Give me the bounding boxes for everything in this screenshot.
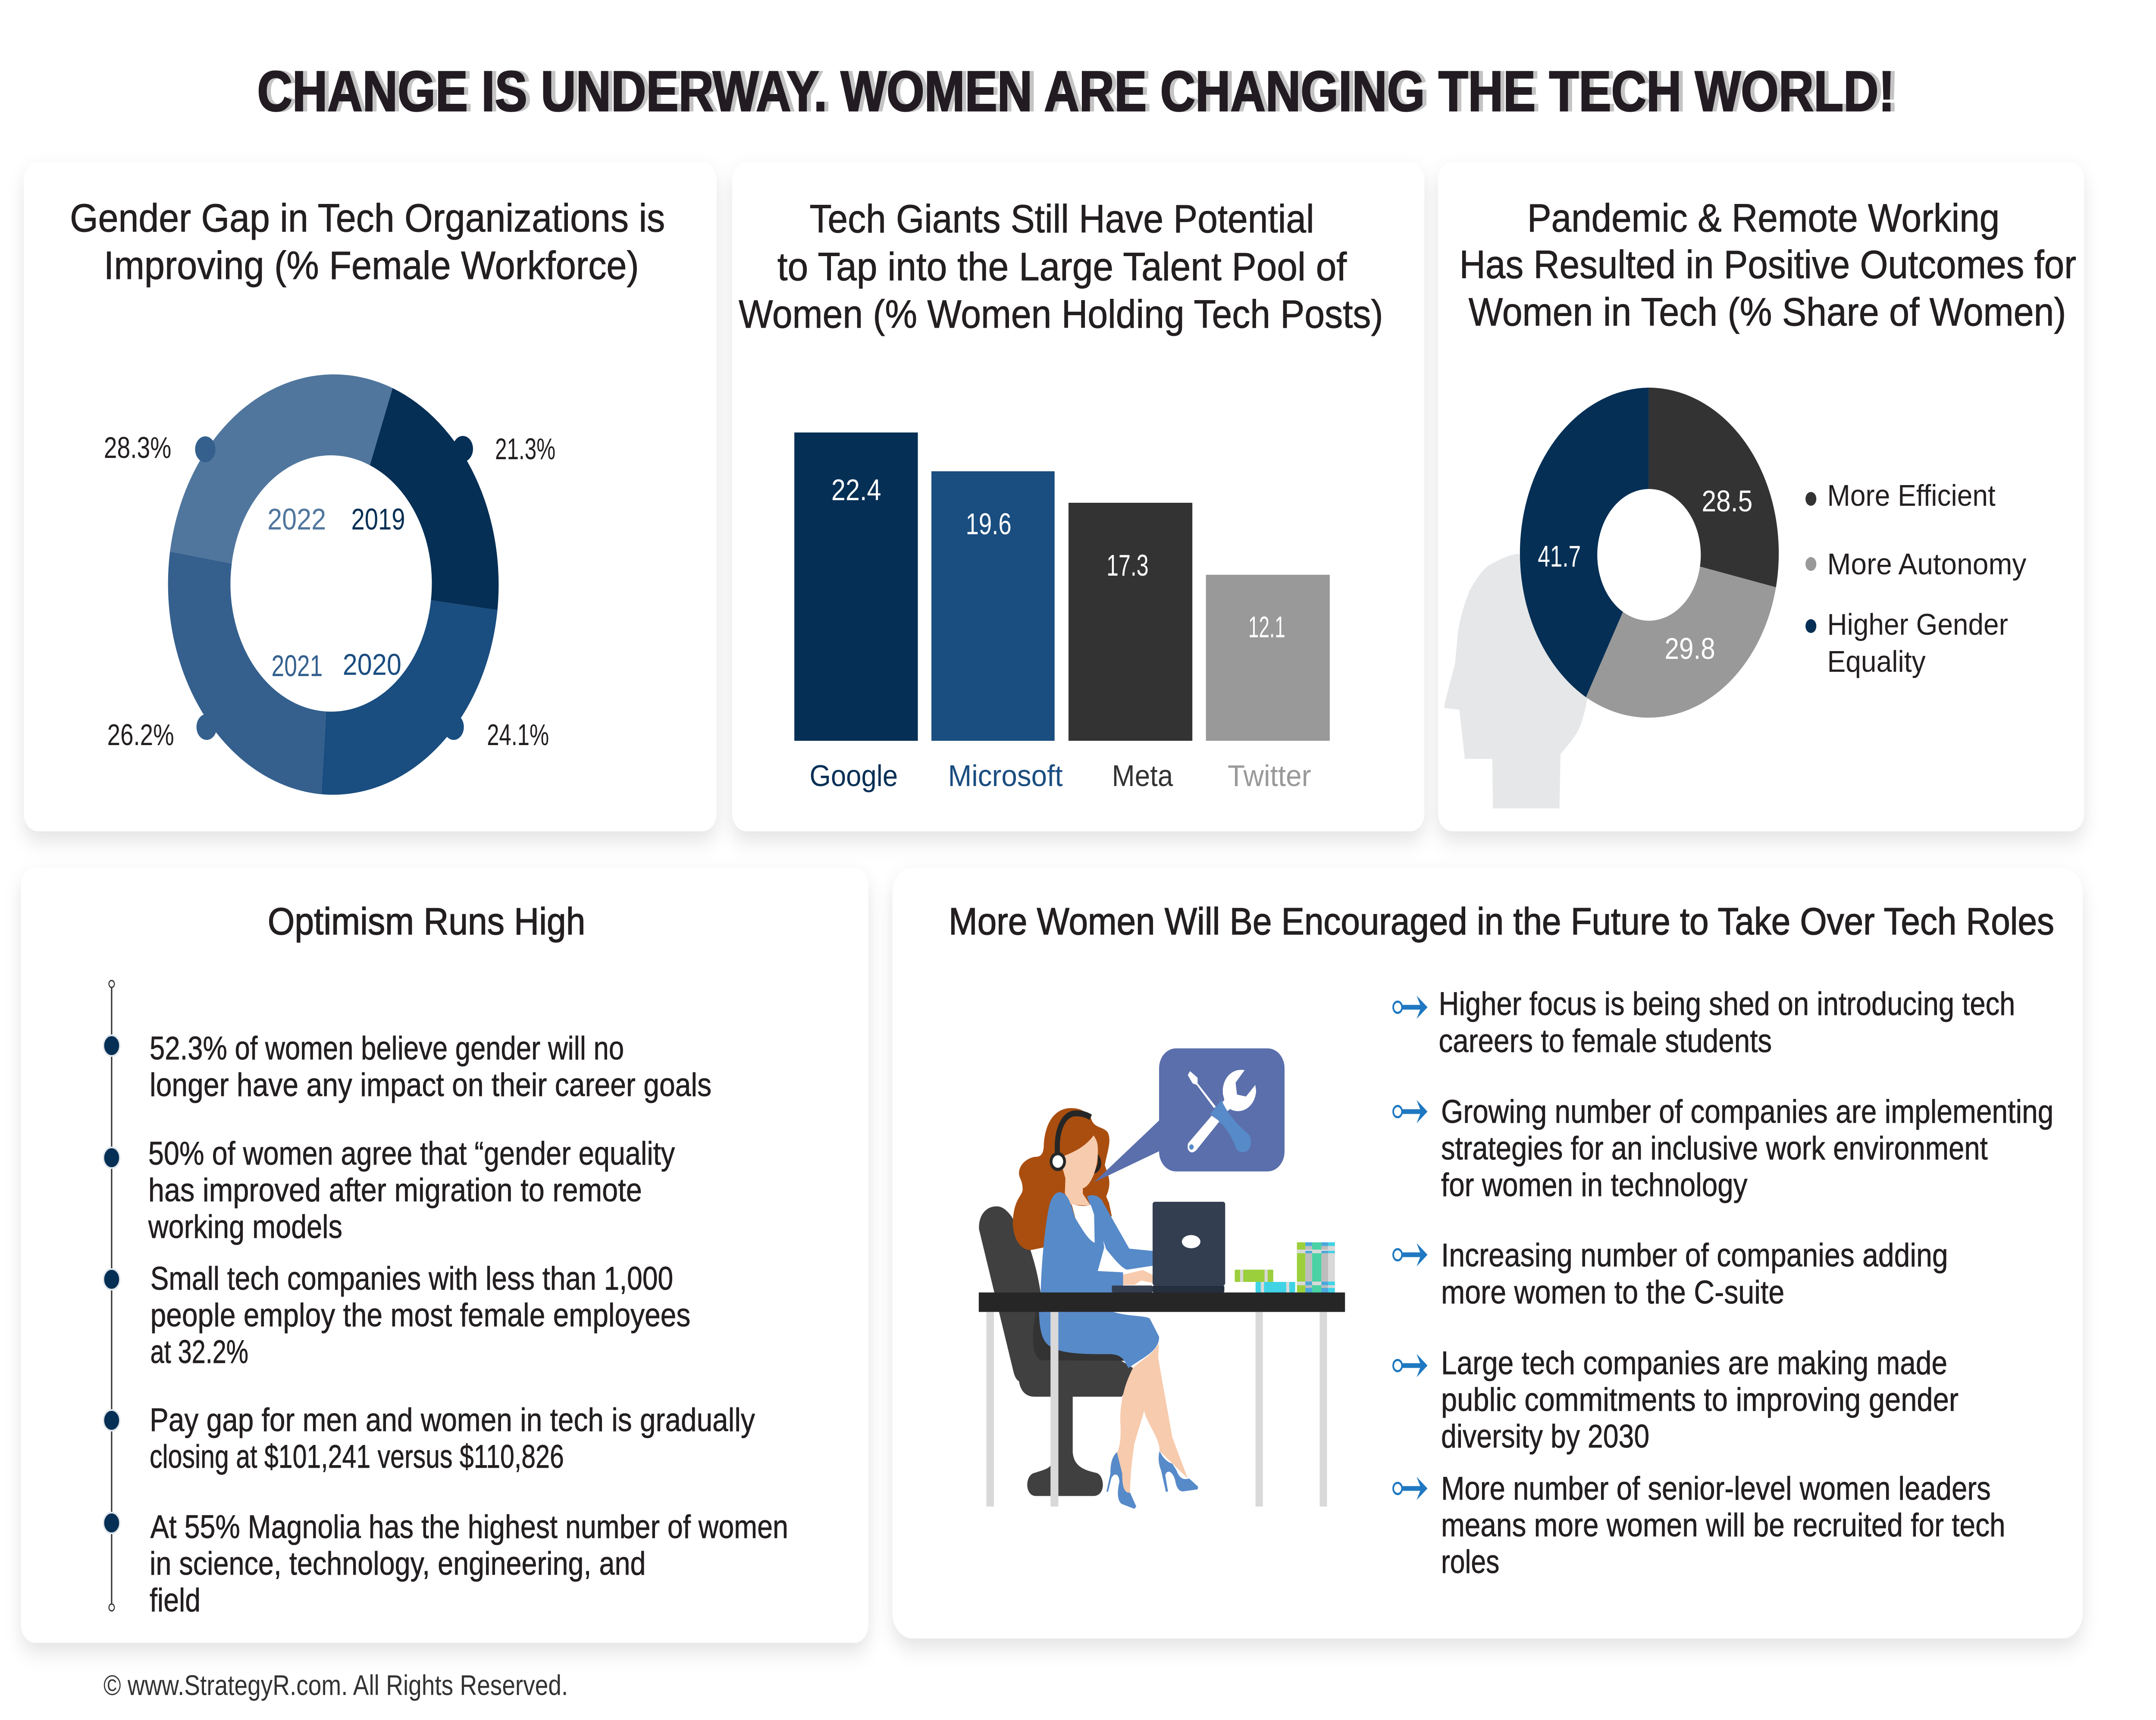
heading: future: More Women Will Be Encouraged in the Future to Take Over Tech Roles: [949, 900, 2054, 943]
text: timeline items: field: [150, 1582, 201, 1619]
donut chart: share of women: 41.7: [1538, 540, 1581, 573]
arrow bullets: [1393, 996, 1428, 1500]
legend: Equality: [1827, 645, 1926, 679]
heading: pandemic: Women in Tech (% Share of Women): [1469, 290, 2066, 334]
text: timeline items: 52.3% of women believe gender will no: [150, 1030, 624, 1067]
timeline: [103, 981, 120, 1611]
donut chart: share of women: 29.8: [1665, 632, 1715, 666]
text: future list: public commitments to improving gender: [1441, 1382, 1959, 1418]
donut chart: share of women: 28.5: [1702, 485, 1752, 518]
bar chart: Microsoft: [948, 759, 1063, 793]
hair: [1013, 1108, 1112, 1250]
heading: pandemic: [1459, 196, 2076, 334]
legend: Higher Gender: [1827, 608, 2008, 642]
text: timeline items: in science, technology, engineering, and: [150, 1545, 646, 1582]
text: future list: careers to female students: [1438, 1023, 1772, 1059]
text: future list: Higher focus is being shed on introducing tech: [1438, 986, 2015, 1022]
donut value labels: 28.3%: [104, 431, 171, 465]
bar chart: 17.3: [1106, 549, 1149, 583]
heading: gender gap: Gender Gap in Tech Organizations is: [70, 196, 665, 240]
heading: tech giants: to Tap into the Large Talent Pool of: [777, 244, 1347, 289]
legend: More Autonomy: [1827, 548, 2027, 581]
text: future list: for women in technology: [1441, 1167, 1748, 1203]
text: future list: roles: [1441, 1544, 1499, 1580]
heading: tech giants: [739, 197, 1383, 336]
donut chart: female workforce by year: [168, 374, 498, 795]
footer: copyright: © www.StrategyR.com. All Rights Reserved.: [103, 1669, 568, 1701]
bar chart: 22.4: [831, 473, 881, 507]
illustration: woman at desk with laptop: [979, 1048, 1345, 1509]
bar chart: Google: [810, 759, 898, 793]
shoes: [1106, 1451, 1198, 1509]
headset: [1050, 1113, 1101, 1173]
heading: gender gap: [70, 196, 665, 288]
heading: pandemic: Has Resulted in Positive Outcomes for: [1459, 242, 2076, 287]
laptop: [1112, 1202, 1225, 1292]
bar chart: 19.6: [966, 508, 1012, 541]
donut chart: share of women: [1520, 388, 1779, 717]
donut value labels: 24.1%: [487, 718, 549, 752]
bar chart: 12.1: [1248, 611, 1285, 644]
text: future list: means more women will be recruited for tech: [1441, 1507, 2006, 1544]
donut chart: female workforce by year: 2020: [343, 648, 401, 682]
dress: [1039, 1192, 1159, 1368]
donut chart: female workforce by year: 2022: [267, 503, 326, 536]
hand: [1123, 1270, 1153, 1285]
text: timeline items: closing at $101,241 versus $110,826: [150, 1438, 564, 1475]
chair: [979, 1206, 1133, 1496]
panel: future of women in tech: [893, 868, 2083, 1639]
bar chart: Meta: [1112, 759, 1173, 793]
panel: tech giants bar chart: [732, 162, 1424, 831]
heading: tech giants: Women (% Women Holding Tech Posts): [739, 292, 1383, 336]
panel: optimism runs high: [21, 868, 868, 1643]
text: future list: More number of senior-level women leaders: [1441, 1470, 1991, 1507]
donut chart: female workforce by year: 2021: [272, 649, 323, 683]
text: future list: Large tech companies are making made: [1441, 1345, 1947, 1382]
text: timeline items: 50% of women agree that “gender equality: [148, 1135, 675, 1172]
desk: [979, 1292, 1345, 1507]
donut value labels: [104, 431, 555, 752]
text: future list: Increasing number of companies adding: [1441, 1237, 1948, 1274]
text: future list: strategies for an inclusive work environment: [1441, 1130, 1988, 1167]
text: future list: diversity by 2030: [1441, 1418, 1649, 1455]
heading: gender gap: Improving (% Female Workforce): [104, 243, 639, 288]
donut value labels: 21.3%: [495, 432, 555, 466]
donut chart: female workforce by year: 2019: [351, 503, 405, 536]
text: timeline items: people employ the most female employees: [150, 1297, 690, 1334]
text: timeline items: At 55% Magnolia has the highest number of women: [150, 1509, 788, 1545]
text: timeline items: working models: [148, 1209, 342, 1245]
legend: [1805, 479, 2027, 679]
bar chart: Twitter: [1228, 759, 1311, 793]
text: timeline items: at 32.2%: [150, 1334, 248, 1370]
heading: pandemic: Pandemic & Remote Working: [1527, 196, 1999, 240]
text: future list: Growing number of companies are implementing: [1441, 1093, 2053, 1130]
text: timeline items: [148, 1030, 788, 1619]
panel: gender gap donut: [24, 162, 717, 831]
icon: head silhouette: [1445, 554, 1588, 808]
books: [1235, 1242, 1335, 1292]
title: CHANGE IS UNDERWAY. WOMEN ARE CHANGING THE TECH WORLD!: [257, 60, 1895, 123]
text: timeline items: Small tech companies with less than 1,000: [150, 1260, 673, 1297]
donut value labels: 26.2%: [107, 718, 174, 752]
speech bubble with tools icon: [1094, 1048, 1285, 1182]
panel: pandemic and remote working: [1438, 162, 2084, 831]
legend: More Efficient: [1827, 479, 1996, 513]
text: timeline items: longer have any impact on their career goals: [150, 1067, 711, 1103]
text: timeline items: Pay gap for men and women in tech is gradually: [150, 1402, 755, 1438]
bar chart: [794, 432, 1330, 793]
face and neck: [1062, 1135, 1098, 1206]
text: future list: [1438, 986, 2053, 1580]
text: future list: more women to the C-suite: [1441, 1274, 1784, 1311]
legs: [1116, 1343, 1188, 1493]
text: timeline items: has improved after migration to remote: [148, 1172, 642, 1209]
heading: optimism: Optimism Runs High: [268, 900, 585, 943]
heading: tech giants: Tech Giants Still Have Potential: [810, 197, 1314, 241]
